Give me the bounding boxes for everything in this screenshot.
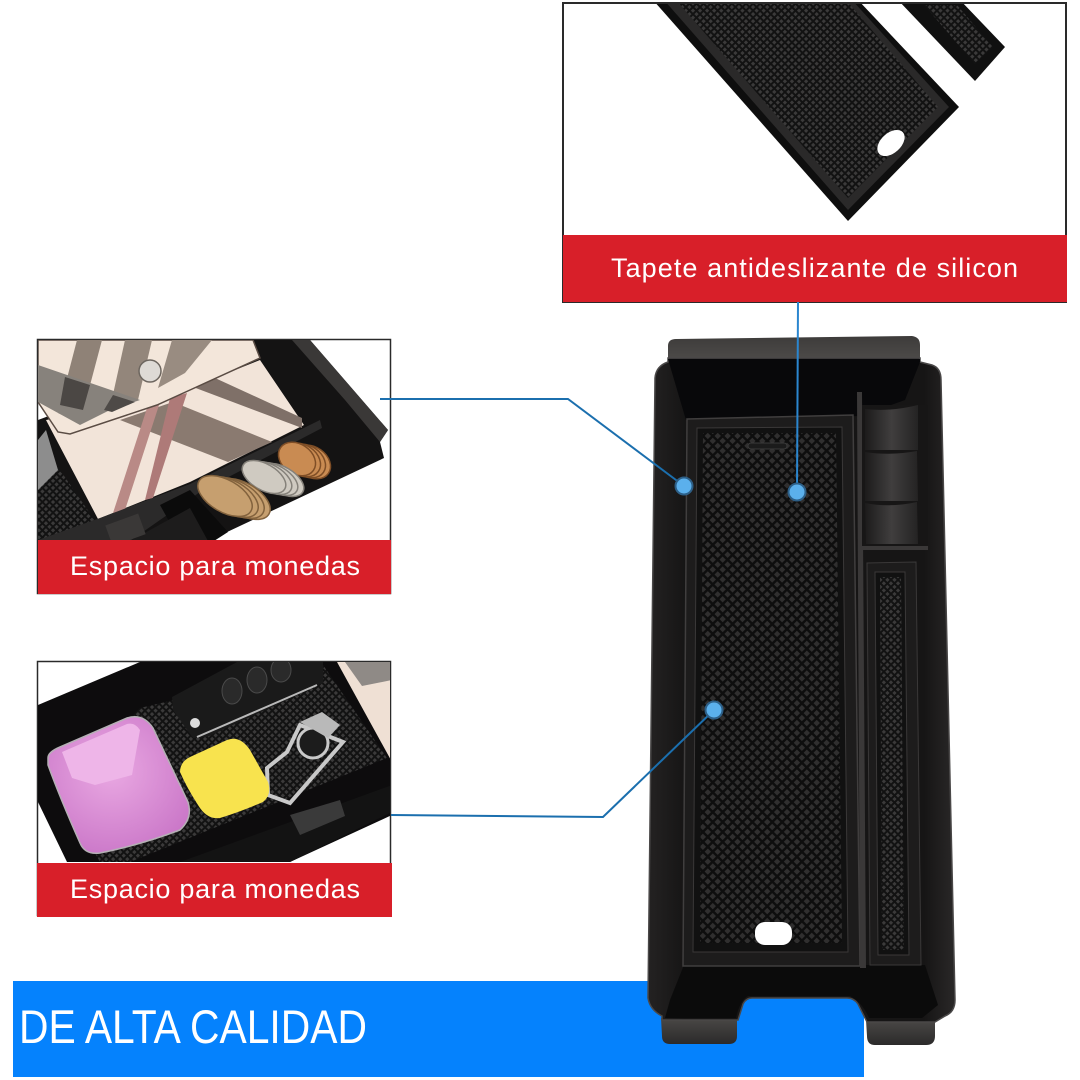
keychain [267,725,343,803]
panel: storage space [37,658,392,917]
bronze coin stack [197,474,271,520]
leader line: coin space [380,399,684,486]
car key [172,662,323,738]
top lip [668,336,920,358]
silver coin stack [241,460,305,498]
cup section [860,405,928,550]
mat finger hole [755,922,792,945]
tray body [648,358,955,1022]
red caption band [38,540,391,594]
marker dot: coin space [676,478,692,494]
panel: silicone mat detail [563,0,1067,302]
red caption band [563,235,1067,302]
caption: Espacio para monedas [70,551,360,581]
caption: Tapete antideslizante de silicon [611,253,1018,283]
copper coin stack [278,442,332,480]
divider wall [857,392,866,968]
silicone mat photo [653,0,1005,221]
narrow silicone mat [867,562,921,965]
photo: wallet and coins in tray [38,340,388,546]
main silicone mat [683,415,860,966]
leader line: silicone mat [797,302,798,492]
banner text: DE ALTA CALIDAD [19,1000,367,1053]
panel: coin space [38,340,391,594]
banner: de alta calidad [13,981,864,1077]
mat pull tab [748,443,787,449]
marker dot: silicone mat [788,484,806,500]
product: console organizer tray [648,336,955,1045]
caption: Espacio para monedas [70,874,360,904]
marker dot: storage space [706,702,722,718]
bottom tabs [661,1018,935,1045]
pink tape measure [48,717,189,853]
yellow tape measure [180,739,269,818]
flashlight [290,858,298,862]
red caption band [37,863,392,917]
leader line: storage space [391,710,714,817]
photo: key, tape measures and flashlight in tray [38,658,392,862]
